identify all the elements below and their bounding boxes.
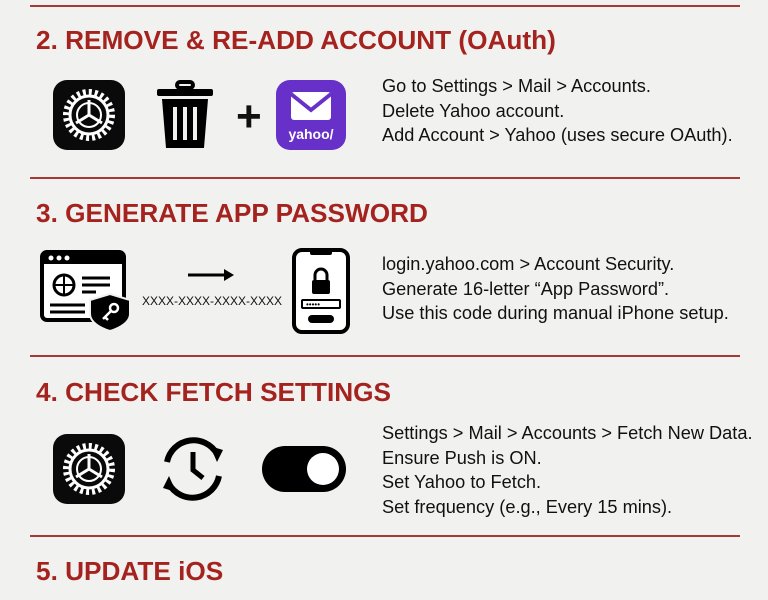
icon: clock sync: [163, 437, 223, 501]
text: step 3: Generate 16-letter “App Password”.: [382, 278, 669, 298]
icon: phone lock: •••••: [306, 300, 320, 309]
text: step 3: Use this code during manual iPhone setup.: [382, 303, 729, 323]
text: step 2: Go to Settings > Mail > Accounts.: [382, 76, 651, 96]
arrow: [188, 269, 234, 281]
text: step 2: [382, 76, 733, 145]
code text: XXXX-XXXX-XXXX-XXXX: [142, 294, 282, 308]
text: step 2: Delete Yahoo account.: [382, 100, 564, 120]
icon: settings gear: [53, 80, 125, 150]
text: step 2: Add Account > Yahoo (uses secure OAuth).: [382, 125, 733, 145]
heading: step 2: 2. REMOVE & RE-ADD ACCOUNT (OAuth): [36, 25, 556, 55]
icon: settings gear: [53, 434, 125, 504]
icon: plus: +: [236, 92, 262, 141]
text: step 4: Set Yahoo to Fetch.: [382, 472, 541, 492]
icon: browser with shield: [40, 250, 130, 330]
text: step 4: [382, 423, 752, 517]
text: step 4: Ensure Push is ON.: [382, 448, 542, 468]
icon: yahoo mail: [276, 80, 346, 150]
heading: step 5: 5. UPDATE iOS: [36, 556, 223, 586]
icon: toggle: [262, 446, 346, 492]
text: step 4: Settings > Mail > Accounts > Fetch New Data.: [382, 423, 752, 443]
heading: step 4: 4. CHECK FETCH SETTINGS: [36, 377, 391, 407]
text: step 3: [382, 254, 729, 323]
text: step 3: login.yahoo.com > Account Security.: [382, 254, 674, 274]
icon: trash: [157, 80, 213, 148]
icon: yahoo mail: yahoo/: [288, 126, 334, 142]
icon: phone lock: [292, 248, 350, 334]
heading: step 3: 3. GENERATE APP PASSWORD: [36, 198, 428, 228]
text: step 4: Set frequency (e.g., Every 15 mins).: [382, 496, 672, 516]
